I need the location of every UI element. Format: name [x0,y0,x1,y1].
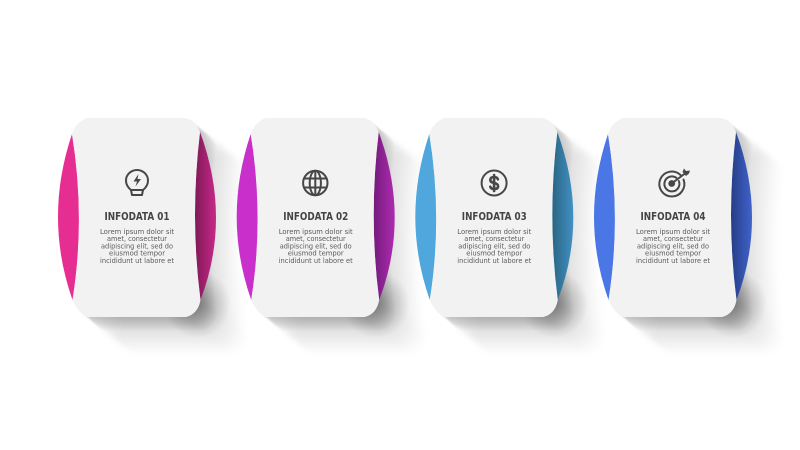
heading: INFODATA 02 [283,211,348,223]
body text: adipiscing elit, sed do [458,242,530,250]
body text: incididunt ut labore et [457,257,532,265]
card 1 [58,118,247,354]
long shadow [74,120,246,354]
icon: light bulb [126,170,148,195]
right lens [195,132,216,300]
body text: amet, consectetur [464,235,525,243]
card 3 [415,118,604,354]
body text: Lorem ipsum dolor sit [100,228,174,236]
body text [279,228,353,265]
body text: Lorem ipsum dolor sit [279,228,353,236]
body text: amet, consectetur [286,235,346,243]
body text: amet, consectetur [107,235,167,243]
long shadow [610,120,782,354]
heading: INFODATA 01 [104,211,170,223]
left lens [237,134,258,300]
body text [457,228,532,265]
body text: incididunt ut labore et [279,257,353,265]
right lens [374,132,395,300]
body text: adipiscing elit, sed do [280,242,352,250]
body text: amet, consectetur [643,235,703,243]
card panel [608,118,736,317]
body text [100,228,174,265]
right lens [731,132,752,300]
body text: incididunt ut labore et [100,257,174,265]
body text: incididunt ut labore et [636,257,710,265]
body text: adipiscing elit, sed do [101,242,173,250]
icon: dollar coin [482,170,507,196]
card panel [429,118,558,317]
long shadow [431,120,604,354]
left lens [415,134,436,300]
left lens [58,134,79,300]
body text [636,228,710,265]
heading: INFODATA 04 [640,211,706,223]
card panel [251,118,379,317]
body text: eiusmod tempor [645,250,701,258]
body text: Lorem ipsum dolor sit [457,228,532,236]
body text: eiusmod tempor [466,250,523,258]
body text: eiusmod tempor [109,250,165,258]
icon: globe [303,171,328,195]
left lens [594,134,615,300]
card 4 [594,118,782,354]
heading: INFODATA 03 [462,211,527,223]
icon: target with arrow [659,168,690,197]
body text: eiusmod tempor [288,250,344,258]
long shadow [253,120,425,354]
card 2 [237,118,425,354]
body text: adipiscing elit, sed do [637,242,709,250]
card panel [72,118,200,317]
body text: Lorem ipsum dolor sit [636,228,710,236]
right lens [552,132,573,300]
